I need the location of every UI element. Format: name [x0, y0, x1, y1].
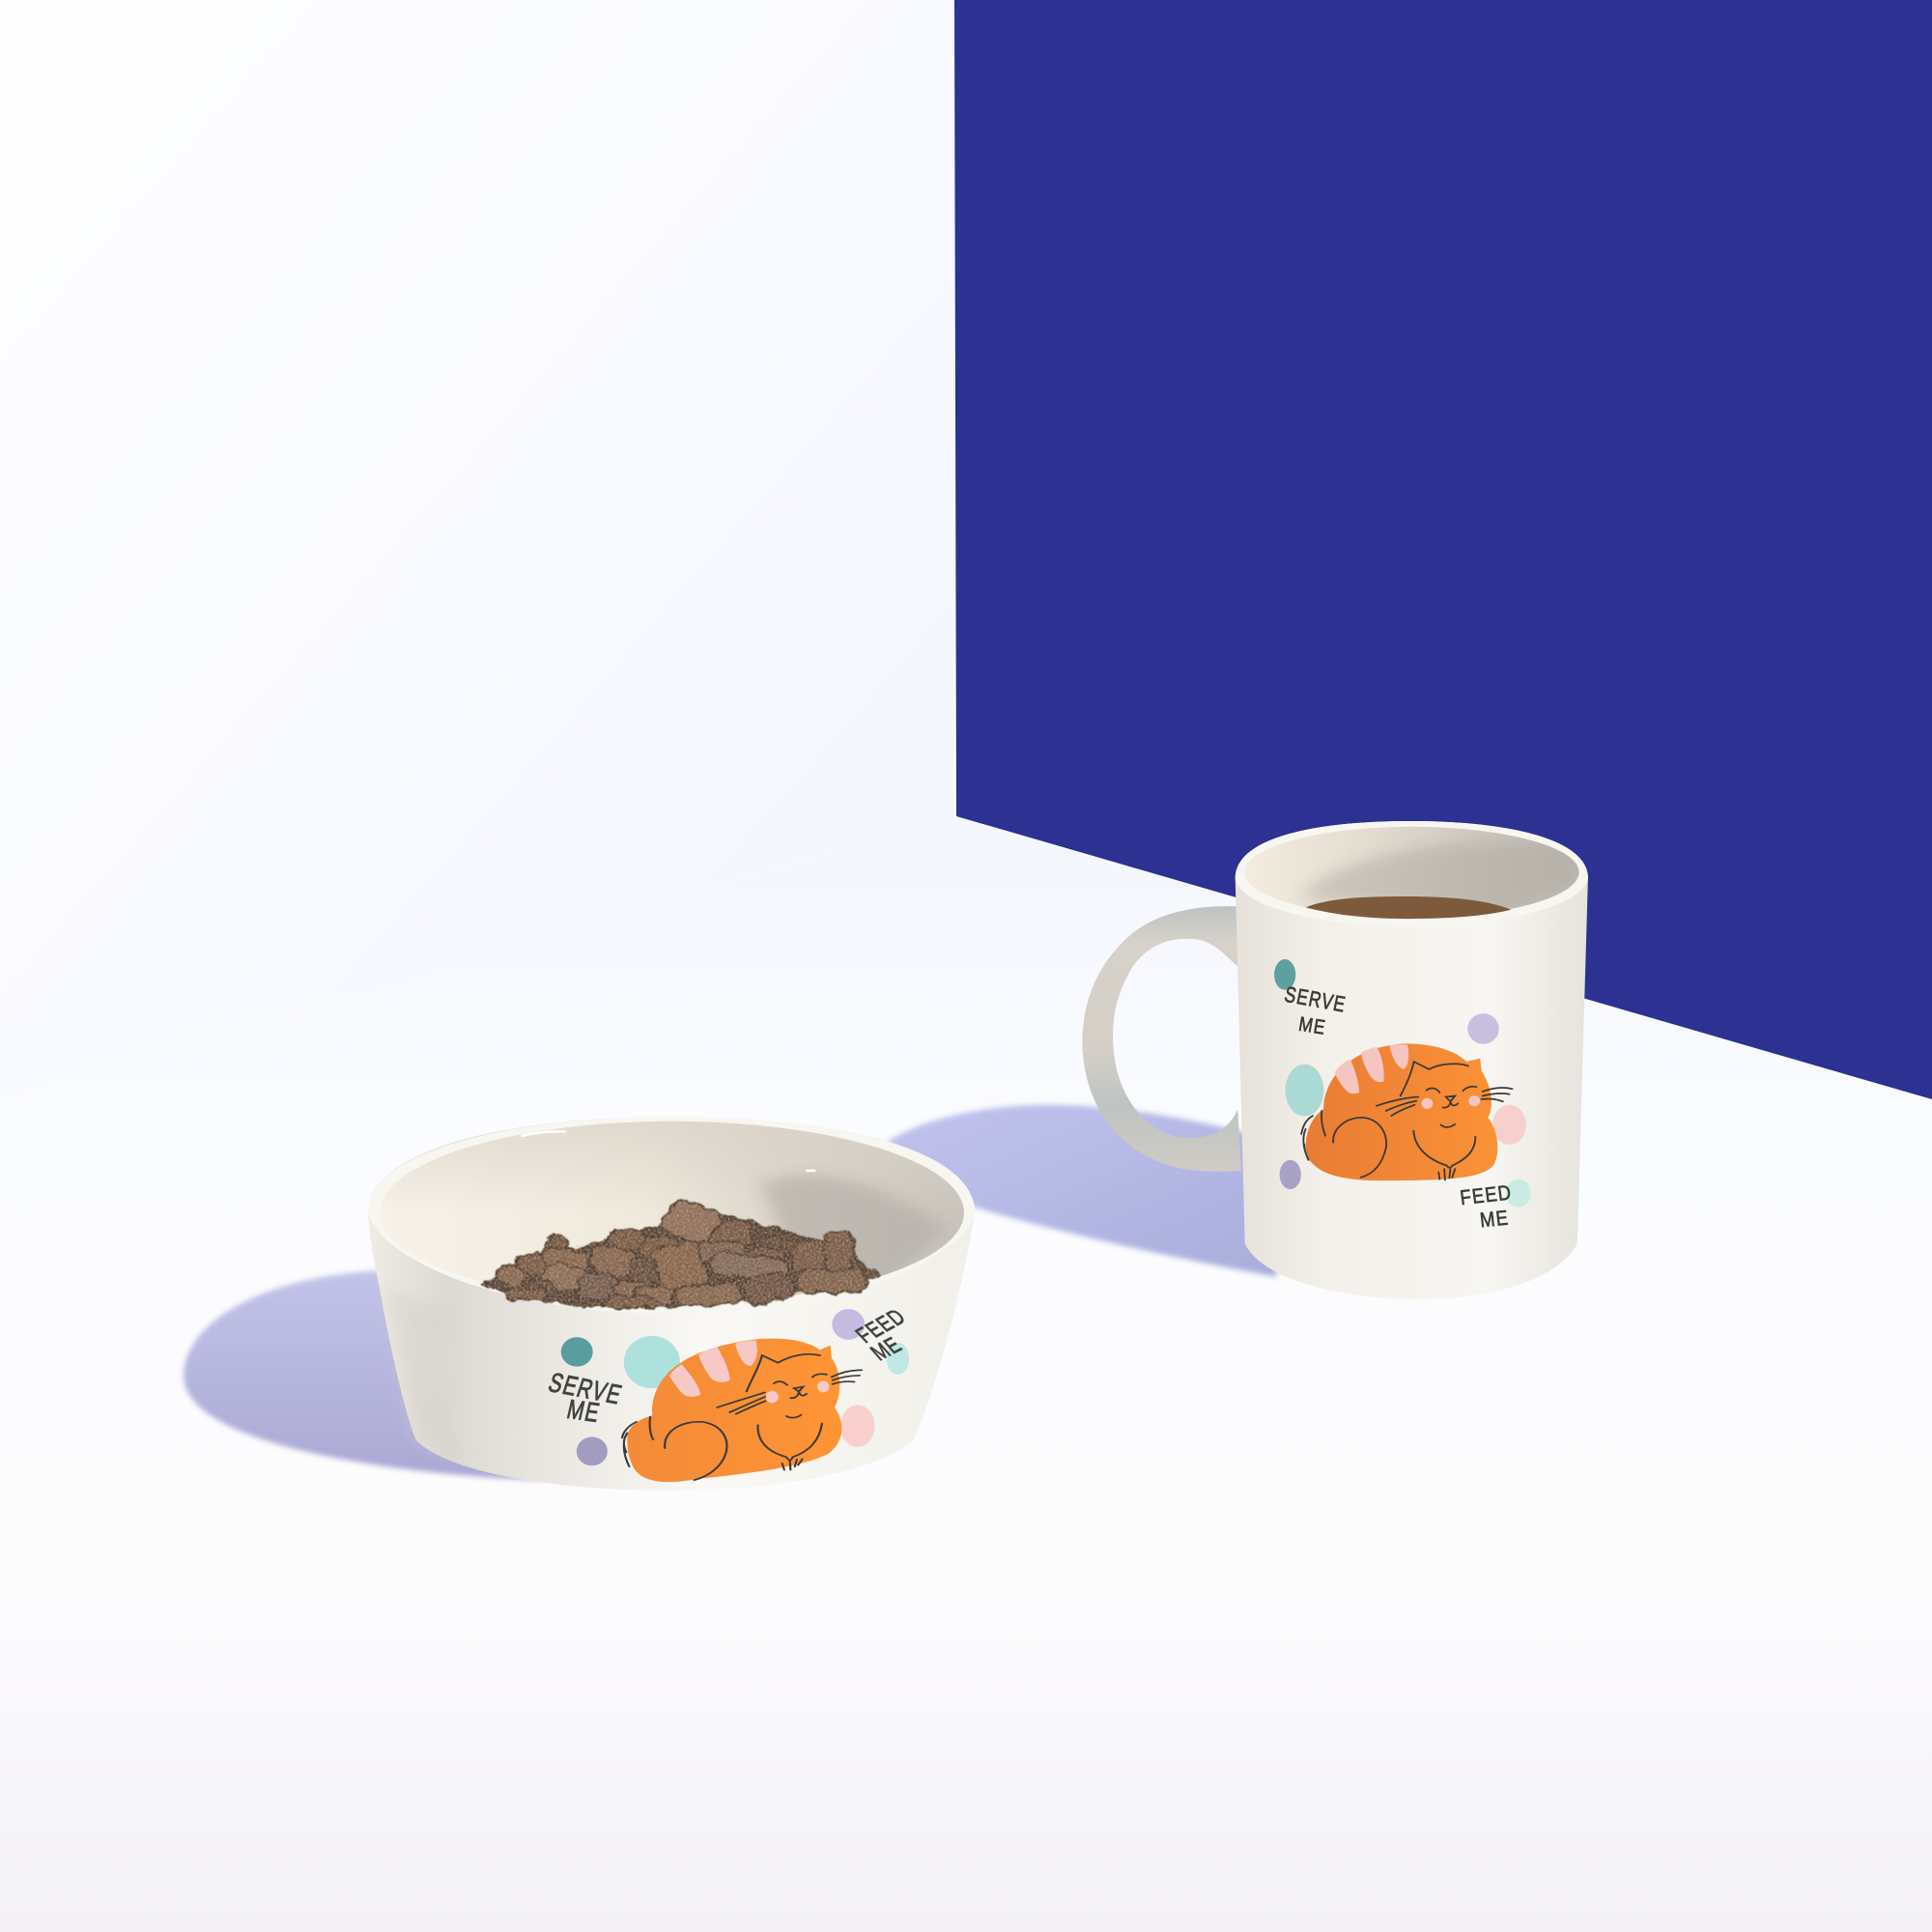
bowl — [368, 1117, 975, 1491]
dot: teal — [1274, 959, 1295, 990]
coffee — [1306, 896, 1511, 919]
cat cheeks — [766, 1381, 829, 1403]
text: SERVE ME: ME — [564, 1395, 603, 1429]
text: FEED ME — [1459, 1181, 1514, 1233]
bowl illustration — [545, 1304, 912, 1482]
text: FEED ME: FEED — [850, 1304, 912, 1348]
dot: lilac — [1467, 1013, 1499, 1044]
dot: pale mint — [1506, 1179, 1531, 1208]
cat face and line work — [1301, 1062, 1512, 1179]
text: FEED ME: ME — [865, 1332, 907, 1365]
background: floor — [0, 816, 1932, 1932]
bowl interior — [380, 1122, 964, 1303]
bowl rim — [368, 1117, 975, 1314]
mug — [1082, 821, 1588, 1299]
text: FEED ME: ME — [1479, 1207, 1510, 1233]
mug rim — [1236, 821, 1588, 926]
kibble pile — [483, 1197, 881, 1307]
dot: pink — [840, 1405, 875, 1447]
background: white left wall — [0, 0, 954, 1096]
text: SERVE ME — [1283, 983, 1349, 1039]
text: SERVE ME: ME — [1297, 1013, 1327, 1039]
mug interior shadow — [1302, 842, 1571, 909]
text: FEED ME: FEED — [1459, 1181, 1514, 1210]
text: SERVE ME: SERVE — [545, 1369, 626, 1410]
dot: pale teal — [624, 1336, 680, 1388]
bowl outer body — [368, 1117, 975, 1491]
cat body — [1306, 1043, 1497, 1180]
dot: pale mint — [887, 1343, 909, 1375]
text: SERVE ME: SERVE — [1283, 983, 1349, 1017]
dot: pink — [1492, 1105, 1526, 1145]
bowl interior top shade — [380, 1122, 964, 1303]
cat cheeks — [1421, 1098, 1433, 1109]
mug interior — [1244, 827, 1579, 918]
bowl interior shade — [761, 1176, 950, 1291]
mug body — [1236, 821, 1588, 1299]
bowl side shade — [384, 1285, 464, 1461]
dot: lilac — [832, 1309, 865, 1340]
cat stripes — [1334, 1044, 1408, 1094]
mug handle — [1082, 906, 1241, 1172]
bowl highlights — [523, 1131, 814, 1171]
mug illustration — [1274, 959, 1531, 1233]
dot: teal — [561, 1337, 593, 1367]
cat stripes — [669, 1341, 757, 1397]
dot: dark lilac — [577, 1436, 608, 1465]
shadow: bowl shadow on floor — [184, 1270, 541, 1480]
dot: dark lilac — [1280, 1160, 1301, 1189]
background: blue wall — [954, 0, 1932, 1099]
dot: pale teal — [1286, 1065, 1323, 1116]
shadow: mug shadow on floor — [887, 1105, 1277, 1277]
cat face and line work — [622, 1354, 862, 1480]
cat body — [627, 1339, 841, 1482]
